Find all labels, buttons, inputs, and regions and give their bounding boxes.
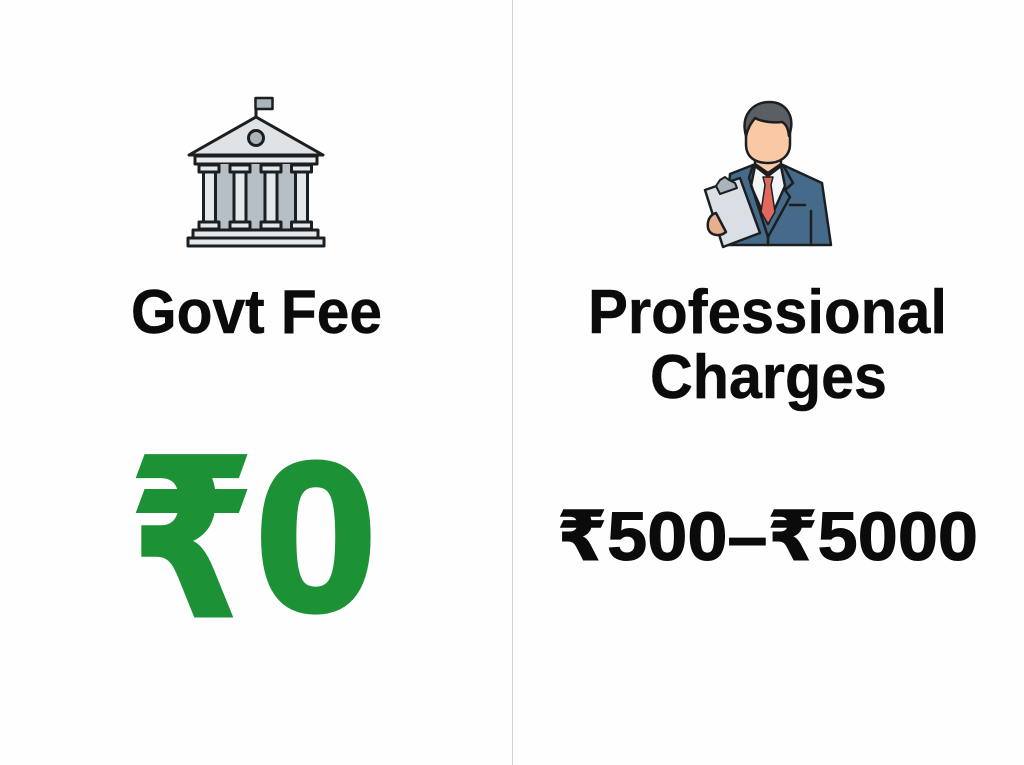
icon: professional with clipboard: [705, 102, 831, 247]
value: price range: ₹500–₹5000: [557, 497, 978, 577]
value: zero rupees: ₹: [128, 412, 254, 668]
heading: professional charges: Professional: [588, 278, 947, 347]
heading: professional charges: Charges: [650, 343, 887, 412]
value: zero rupees: 0: [255, 418, 377, 655]
panel: professional charges: [557, 102, 978, 577]
value: zero rupees: [128, 412, 377, 668]
icon: government building: [188, 98, 324, 246]
heading: govt fee: Govt Fee: [131, 278, 382, 347]
panel: govt fee: [128, 98, 382, 668]
heading: professional charges: [588, 278, 947, 412]
